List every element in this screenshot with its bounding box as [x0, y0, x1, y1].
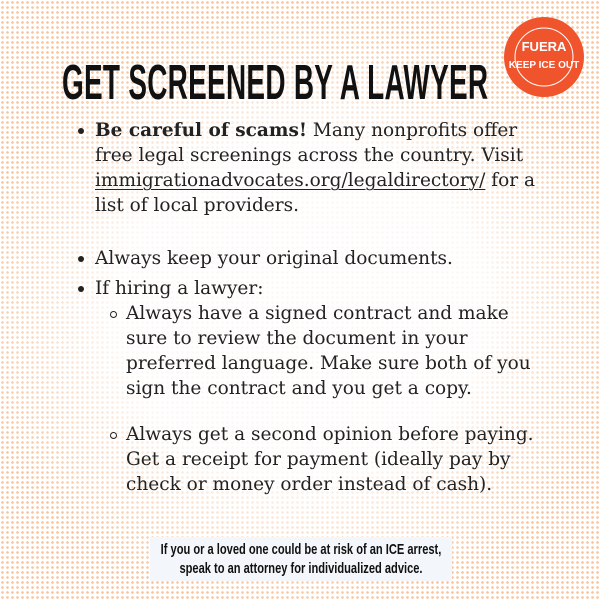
text: check or money order instead of cash). — [126, 474, 492, 495]
text: Get a receipt for payment (ideally pay by — [126, 449, 510, 470]
text: sign the contract and you get a copy. — [126, 378, 472, 399]
text: free legal screenings across the country. Visit — [95, 145, 523, 166]
logo badge: FUERA — [522, 39, 567, 54]
text: If hiring a lawyer: — [95, 278, 263, 299]
bullet 2 — [78, 248, 453, 269]
footer callout — [150, 537, 452, 581]
text: immigrationadvocates.org/legaldirectory/ for a — [95, 170, 535, 191]
bullet 1 — [78, 120, 535, 216]
text: Always keep your original documents. — [95, 248, 453, 269]
text: Always get a second opinion before paying. — [126, 424, 534, 445]
footer callout: speak to an attorney for individualized advice. — [179, 560, 423, 577]
text: list of local providers. — [95, 195, 299, 216]
text: sure to review the document in your — [126, 328, 468, 349]
text: Be careful of scams! Many nonprofits offer — [95, 120, 517, 141]
title: GET SCREENED BY A LAWYER — [62, 56, 488, 110]
bullet 3 — [78, 278, 534, 495]
logo badge — [504, 17, 584, 97]
text: preferred language. Make sure both of you — [126, 353, 531, 374]
logo badge: KEEP ICE OUT — [509, 60, 579, 71]
text: Always have a signed contract and make — [126, 303, 509, 324]
footer callout: If you or a loved one could be at risk of an ICE arrest, — [161, 541, 441, 558]
